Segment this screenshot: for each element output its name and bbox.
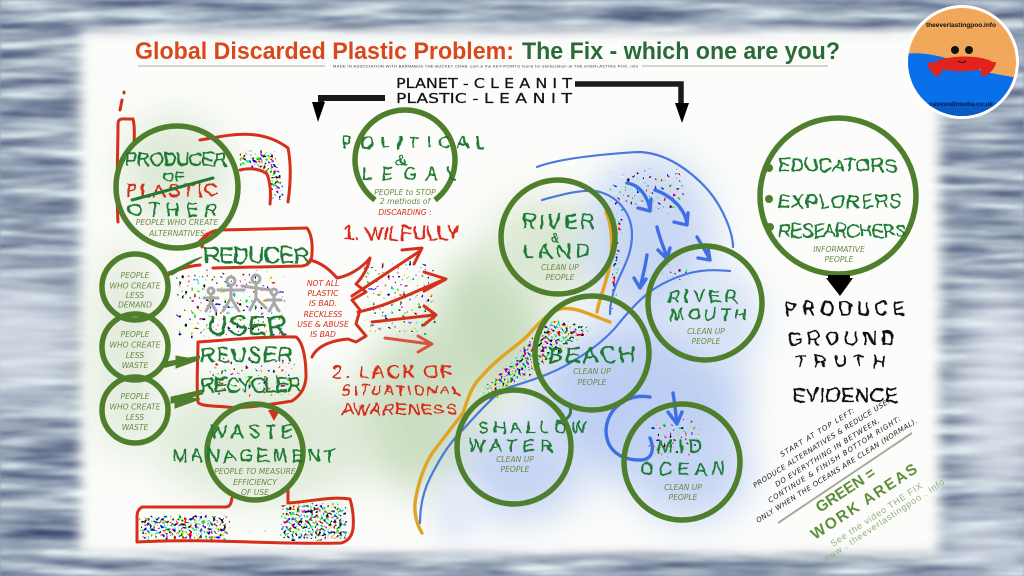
text: produce ground truth evidence: PRODUCE — [785, 299, 905, 320]
circle: river mouth: CLEAN UP — [687, 327, 725, 336]
logo: crab badge: theeverlastingpoo.info — [926, 22, 996, 29]
note: not all plastic is bad — [297, 279, 349, 339]
circle: less waste 2: LESS — [126, 413, 144, 422]
grey stick figures: users — [204, 275, 281, 311]
circle: educators, explorers, researchers: EDUCATORS — [778, 156, 897, 177]
method 2: lack of situational awareness: AWARENESS — [342, 400, 457, 419]
circle: waste management: WASTE — [210, 422, 293, 442]
circle: waste management: PEOPLE TO MEASURE — [214, 467, 296, 476]
instructions: diagonal note: ONLY WHEN THE OCEANS ARE CLEAN (NORMAL). — [755, 417, 919, 525]
circle: political and legal: 2 methods of — [380, 197, 431, 206]
subtitle credit line: MADE IN ASSOCIATION WITH BARNABUS THE BUCKET CRAB .com & the KEY-POINTS found for deliberation at THE EVERLASTING POO .info — [333, 64, 639, 68]
note: not all plastic is bad: USE & ABUSE — [297, 320, 349, 329]
circle: educators, explorers, researchers — [760, 118, 916, 274]
note: not all plastic is bad: RECKLESS — [304, 310, 343, 319]
slogan — [396, 76, 573, 107]
circle: political and legal: DISCARDING : — [378, 208, 432, 217]
circle: river and land: & — [550, 230, 559, 245]
instructions: diagonal note: CONTINUE & FINISH BOTTOM RIGHT: — [767, 415, 902, 505]
circle: waste management: EFFICIENCY — [233, 478, 278, 487]
circle: educators, explorers, researchers: PEOPLE — [825, 255, 854, 264]
instructions: diagonal note: DO EVERYTHING IN BETWEEN, — [774, 417, 881, 489]
circle: shallow water — [457, 390, 587, 504]
circle: political and legal: PEOPLE to STOP — [374, 188, 436, 197]
green work area wash: left — [90, 115, 600, 505]
method 2: lack of situational awareness — [332, 362, 460, 419]
circle: less waste 1: LESS — [126, 351, 144, 360]
white paper panel — [80, 30, 940, 555]
note: not all plastic is bad: IS BAD. — [309, 299, 337, 308]
circle: political and legal: LEGAL — [362, 164, 457, 184]
circle: political and legal: & — [396, 152, 406, 169]
circle: producer: PLASTIC — [125, 181, 218, 202]
circle: shallow water: WATER — [468, 436, 553, 456]
arrow: educators to evidence — [826, 275, 853, 296]
key: green = work areas: GREEN = — [813, 465, 879, 516]
arrow: to producers — [321, 98, 385, 104]
circle: producer: ALTERNATIVES — [148, 229, 205, 238]
red plastic flow outline — [117, 92, 370, 543]
arrowhead: right — [675, 103, 689, 123]
label: reducer: REDUCER — [203, 242, 310, 268]
circle: river and land: RIVER — [522, 211, 595, 233]
divider line — [778, 433, 912, 523]
key: green = work areas: See the video THE FIX — [829, 481, 924, 549]
key: green = work areas: WORK AREAS — [808, 461, 921, 543]
circle: less waste 2 — [102, 377, 168, 443]
title: The Fix - which one are you? — [522, 38, 840, 65]
circle: educators, explorers, researchers: EXPLORERS — [778, 192, 902, 213]
circle: less demand: WHO CREATE — [109, 282, 161, 290]
circle: less waste 2: WHO CREATE — [109, 402, 161, 412]
circle: producer: OF — [163, 168, 183, 184]
circle: shallow water: SHALLOW — [478, 418, 587, 437]
circle: mid ocean: MID — [657, 437, 702, 458]
method 2: lack of situational awareness: SITUATIONAL — [342, 382, 460, 398]
note: not all plastic is bad: IS BAD — [310, 330, 336, 339]
slogan: PLANET - C L E A N I T — [396, 76, 573, 92]
circle: producer: OTHER — [128, 200, 218, 220]
circle: less waste 1: WHO CREATE — [109, 340, 161, 350]
text: produce ground truth evidence: EVIDENCE — [792, 385, 898, 407]
label: reuser and recycler: RECYCLER — [200, 374, 302, 397]
method 1: wilfully: 1. WILFULLY — [343, 223, 460, 245]
circle: mid ocean: OCEAN — [640, 459, 725, 479]
circle: less demand: DEMAND — [118, 300, 152, 310]
circle: less demand — [102, 254, 168, 320]
key: green = work areas: www . theeverlastingpoo . info — [820, 477, 946, 565]
method 2: lack of situational awareness: 2. LACK OF — [332, 362, 452, 382]
circle: producer — [116, 126, 238, 248]
logo: crab badge: cavewallmedia.co.uk — [929, 101, 993, 108]
circle: political and legal — [342, 110, 485, 217]
circle: political and legal: POLITICAL — [342, 133, 485, 152]
circle: producer: PEOPLE WHO CREATE — [136, 218, 218, 227]
circle: mid ocean: CLEAN UP — [664, 483, 702, 492]
label: user: USER — [208, 310, 287, 341]
circle: less demand: PEOPLE — [121, 271, 150, 280]
title: Global Discarded Plastic Problem: — [135, 38, 514, 65]
instructions: diagonal note: START AT TOP LEFT: — [779, 407, 856, 459]
circle: river and land: CLEAN UP — [541, 263, 579, 272]
plastic confetti scatter — [136, 148, 710, 555]
circle: waste management: OF USE — [241, 488, 269, 497]
title — [135, 38, 840, 65]
circle: river and land: PEOPLE — [546, 273, 575, 282]
circle: waste management: MANAGEMENT — [172, 446, 335, 466]
circle: river mouth: PEOPLE — [692, 337, 721, 346]
circle: less waste 2: PEOPLE — [121, 392, 150, 401]
circle: beach — [535, 296, 649, 410]
circle: river mouth — [648, 246, 762, 360]
red arrows: discarding spreading out — [352, 248, 446, 352]
text: produce ground truth evidence: GROUND — [787, 329, 895, 350]
text: produce ground truth evidence: TRUTH — [795, 352, 885, 371]
text: produce ground truth evidence — [785, 299, 905, 407]
circle: river and land — [501, 180, 615, 294]
shoreline and river strokes — [415, 152, 733, 533]
circle: educators, explorers, researchers: INFORMATIVE — [813, 245, 865, 254]
circle: mid ocean: PEOPLE — [669, 493, 698, 502]
logo: crab badge — [905, 5, 1020, 120]
circle: less waste 1: WASTE — [122, 361, 148, 370]
circle: beach: CLEAN UP — [573, 367, 611, 376]
slogan: PLASTIC - L E A N I T — [396, 91, 573, 107]
circle: mid ocean — [624, 404, 740, 520]
note: not all plastic is bad: PLASTIC — [307, 289, 339, 298]
circle: river and land: LAND — [523, 241, 590, 263]
arrowhead: left — [312, 102, 325, 122]
circle: beach: PEOPLE — [578, 378, 607, 387]
circle: less waste 1: PEOPLE — [121, 330, 150, 339]
arrow: to ocean — [575, 84, 681, 104]
green connector arrows — [166, 257, 202, 408]
circle: waste management — [172, 404, 335, 500]
circle: less waste 1 — [102, 314, 168, 380]
note: not all plastic is bad: NOT ALL — [307, 279, 339, 288]
circle: river mouth: RIVER — [667, 287, 738, 307]
circle: shallow water: PEOPLE — [501, 465, 530, 474]
blue current arrows — [556, 183, 710, 460]
label: reuser and recycler — [200, 344, 302, 397]
instructions: diagonal note: PRODUCE ALTERNATIVES & REDUCE USE. — [752, 397, 891, 490]
circle: less waste 2: WASTE — [122, 423, 148, 432]
circle: producer: PRODUCER — [125, 150, 227, 171]
circle: river mouth: MOUTH — [670, 305, 747, 324]
circle: beach: BEACH — [548, 342, 635, 368]
circle: shallow water: CLEAN UP — [496, 455, 534, 464]
blue ocean wash — [430, 155, 760, 545]
circle: educators, explorers, researchers: RESEARCHERS — [778, 221, 907, 241]
label: reuser and recycler: REUSER — [200, 344, 293, 367]
circle: less demand: LESS — [126, 291, 144, 300]
